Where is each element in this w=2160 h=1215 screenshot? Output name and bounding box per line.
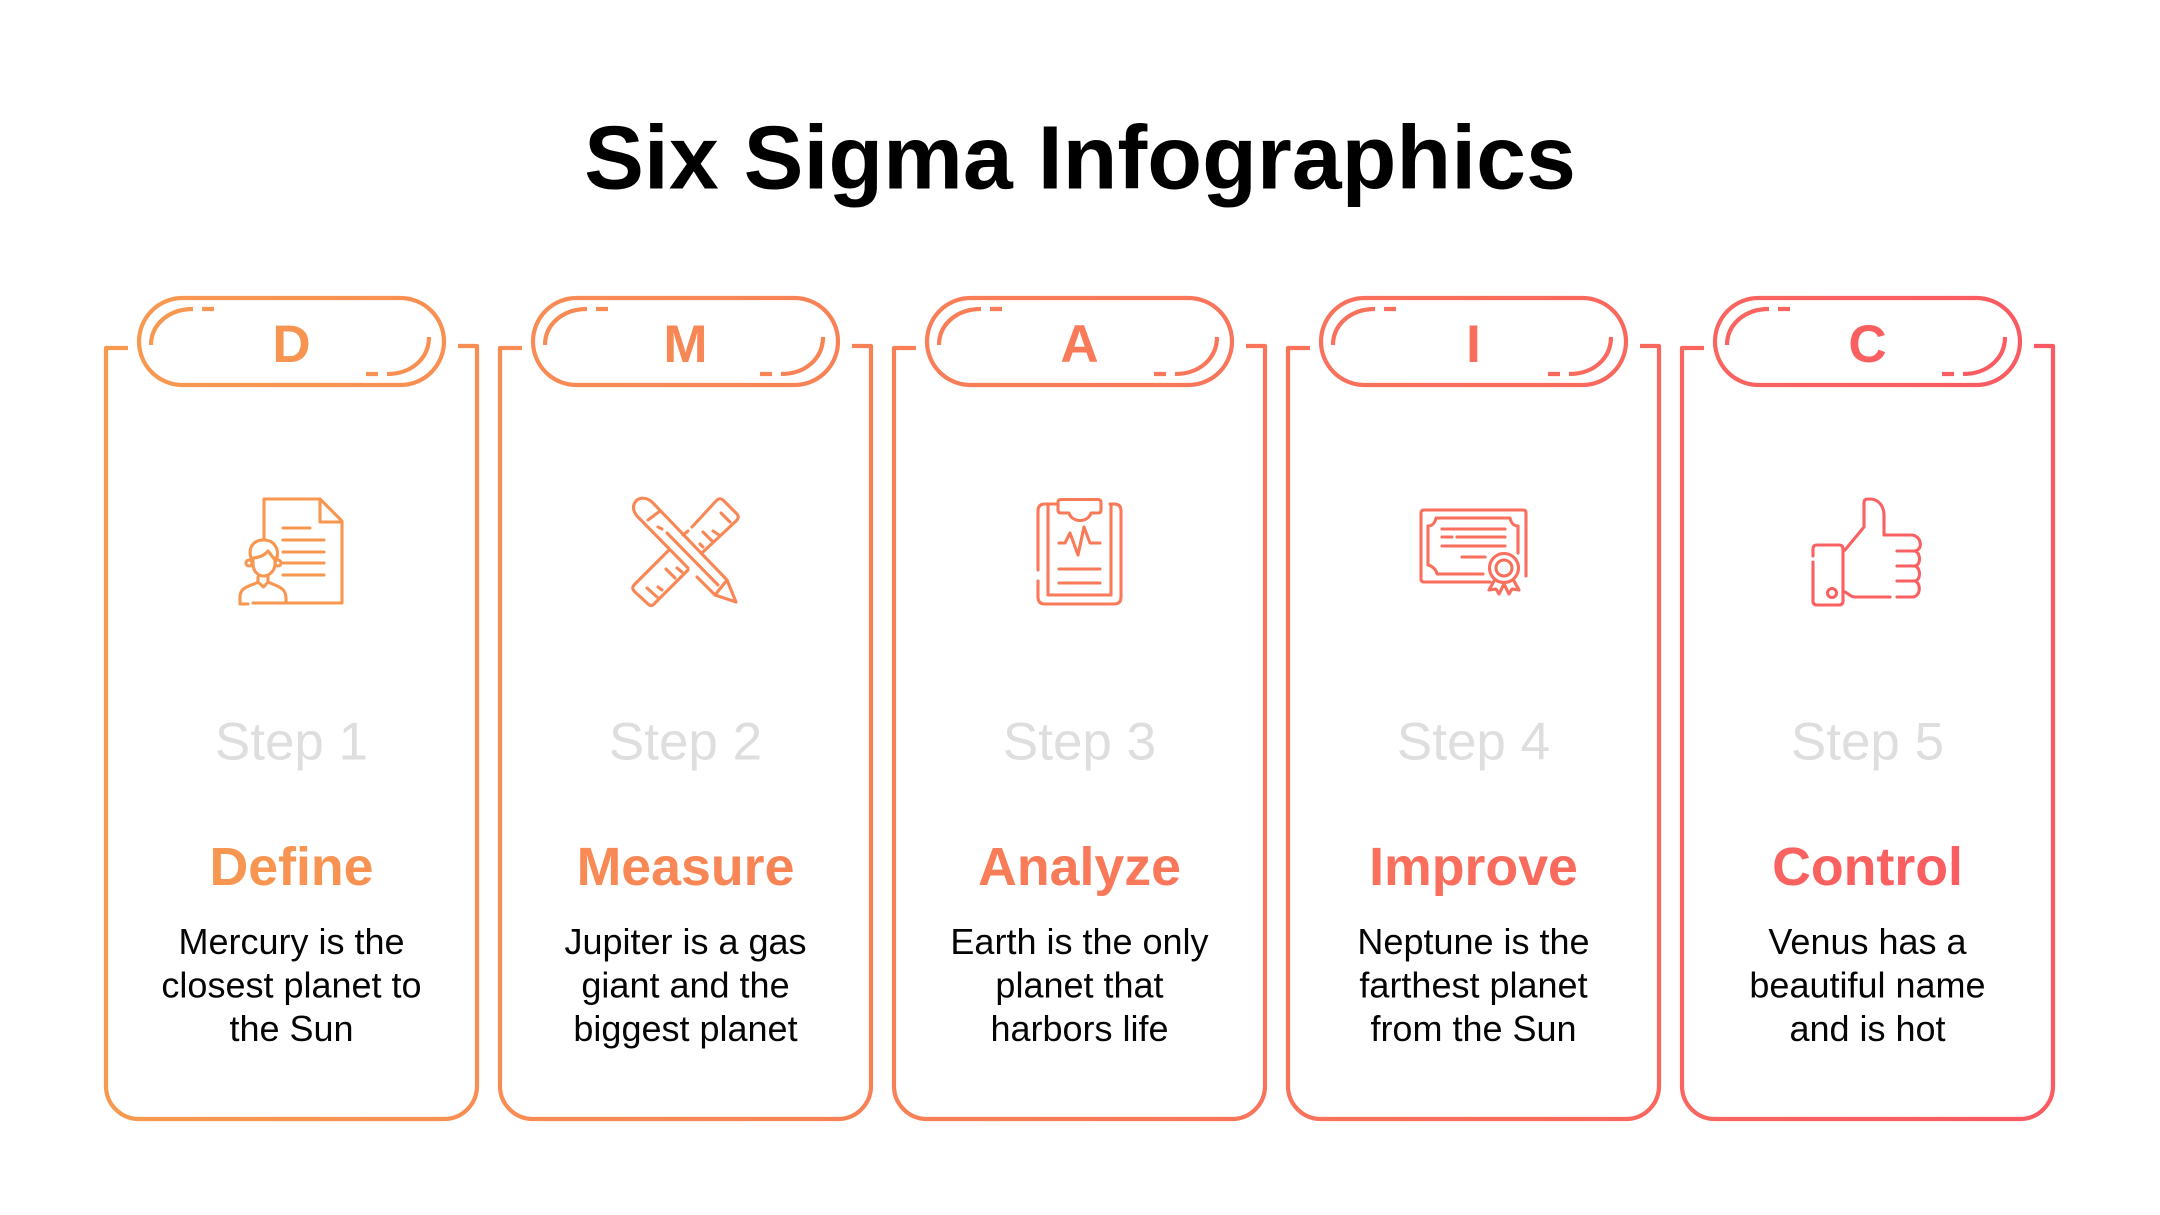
- pill badge: I: I: [1466, 315, 1481, 374]
- panel: Analyze: [894, 298, 1265, 1119]
- description: planet that: [995, 964, 1164, 1006]
- description: Earth is the only: [950, 921, 1209, 962]
- description: Neptune is the: [1357, 921, 1590, 962]
- panel: Control: [1682, 298, 2053, 1119]
- pill badge: C: [1715, 298, 2020, 385]
- description: giant and the: [581, 964, 790, 1006]
- step label: Step 1: [215, 712, 368, 772]
- heading: Measure: [577, 837, 794, 897]
- icon: thumbs up: [1813, 499, 1920, 605]
- pill badge: A: [927, 298, 1232, 385]
- card outline: [106, 346, 477, 1119]
- description: closest planet to: [161, 964, 422, 1006]
- panel: Measure: [500, 298, 871, 1119]
- pill badge: D: [139, 298, 444, 385]
- step label: Step 4: [1397, 712, 1550, 772]
- pill badge: D: D: [272, 315, 311, 374]
- card outline: [894, 346, 1265, 1119]
- icon: medical clipboard: [1038, 500, 1121, 604]
- heading: Define: [209, 837, 374, 897]
- card outline: [1682, 346, 2053, 1119]
- description: beautiful name: [1749, 964, 1986, 1006]
- icon: person with document: [240, 499, 342, 604]
- heading: Improve: [1369, 837, 1578, 897]
- step label: Step 2: [609, 712, 762, 772]
- title: Six Sigma Infographics: [584, 108, 1576, 208]
- pill badge: C: C: [1848, 315, 1887, 374]
- panel: Improve: [1288, 298, 1659, 1119]
- description: biggest planet: [573, 1008, 798, 1049]
- icon: certificate: [1421, 510, 1526, 594]
- step label: Step 5: [1791, 712, 1944, 772]
- description: Venus has a: [1768, 921, 1968, 962]
- description: Jupiter is a gas: [564, 921, 807, 962]
- description: Mercury is the: [178, 921, 405, 962]
- pill badge: M: [533, 298, 838, 385]
- card outline: [1288, 346, 1659, 1119]
- step label: Step 3: [1003, 712, 1156, 772]
- description: from the Sun: [1370, 1008, 1577, 1049]
- pill badge: A: A: [1060, 315, 1099, 374]
- pill badge: I: [1321, 298, 1626, 385]
- card outline: [500, 346, 871, 1119]
- pill badge: M: M: [663, 315, 708, 374]
- heading: Control: [1772, 837, 1963, 897]
- description: harbors life: [990, 1008, 1169, 1049]
- description: and is hot: [1789, 1008, 1946, 1049]
- heading: Analyze: [978, 837, 1181, 897]
- description: the Sun: [229, 1008, 354, 1049]
- description: farthest planet: [1359, 964, 1588, 1006]
- icon: ruler and pencil: [633, 498, 738, 606]
- panel: Define: [106, 298, 477, 1119]
